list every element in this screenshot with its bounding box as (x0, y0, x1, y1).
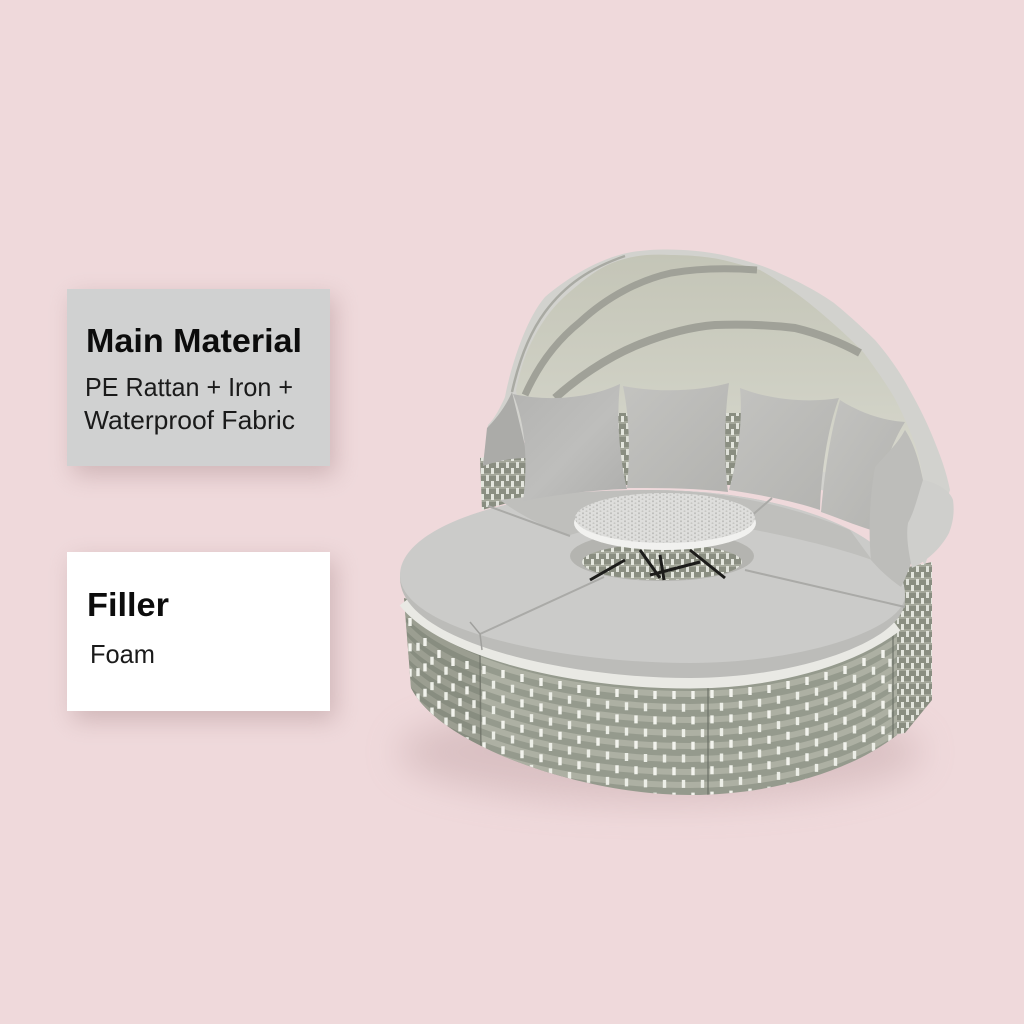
cushion seams (480, 498, 905, 634)
heading: main material: Main Material (86, 322, 302, 359)
left canopy drape (483, 392, 526, 466)
cushion front corner gap (470, 622, 482, 650)
back wicker: right post (893, 562, 932, 735)
infographic canvas (64, 250, 954, 810)
table legs (590, 550, 725, 580)
back wicker: left post (480, 448, 526, 510)
pillows (513, 383, 923, 587)
card shadow (73, 560, 335, 720)
seat cushions (400, 490, 905, 678)
canopy inner left edge (512, 256, 625, 392)
base wicker (400, 590, 910, 800)
pillow 3 (729, 388, 839, 510)
canopy (483, 249, 950, 565)
pillow 2 (623, 383, 729, 492)
table edge (574, 496, 756, 550)
hole lip (570, 531, 754, 581)
text: material list: Waterproof Fabric (84, 405, 295, 435)
card shadow (73, 297, 335, 475)
card background (67, 289, 330, 466)
canopy stripe: upper (525, 269, 757, 395)
panel: filler (67, 552, 335, 720)
pillow 4 (821, 400, 905, 530)
round wicker table (574, 493, 756, 550)
canopy stripe: lower (555, 325, 860, 398)
product: round rattan daybed (398, 249, 954, 802)
panel seams (480, 630, 893, 795)
text: material list (84, 372, 295, 435)
heading: filler: Filler (87, 586, 169, 623)
white weave dashes: even columns (410, 618, 883, 800)
right canopy drape (907, 480, 954, 568)
panel: main material (67, 289, 335, 475)
back cushions shade (500, 490, 872, 560)
hole interior (582, 544, 742, 580)
pillow 5 side (870, 430, 923, 587)
card background (67, 552, 330, 711)
center hole with wicker (570, 531, 754, 581)
back wicker between pillows (614, 413, 742, 485)
horizontal strands (400, 606, 900, 785)
white rim band (404, 602, 897, 683)
pillow 1 (513, 384, 627, 501)
text: material list: PE Rattan + Iron + (85, 372, 293, 402)
white weave dashes: odd columns (418, 643, 890, 800)
dark left panel shade (404, 598, 480, 760)
floor shadow (398, 702, 922, 802)
cushion side (400, 490, 905, 678)
cushion top (400, 490, 905, 663)
canopy inner fabric (516, 255, 923, 480)
canopy outer shell (483, 249, 950, 565)
text: foam: Foam (90, 639, 155, 669)
table top (575, 493, 755, 543)
